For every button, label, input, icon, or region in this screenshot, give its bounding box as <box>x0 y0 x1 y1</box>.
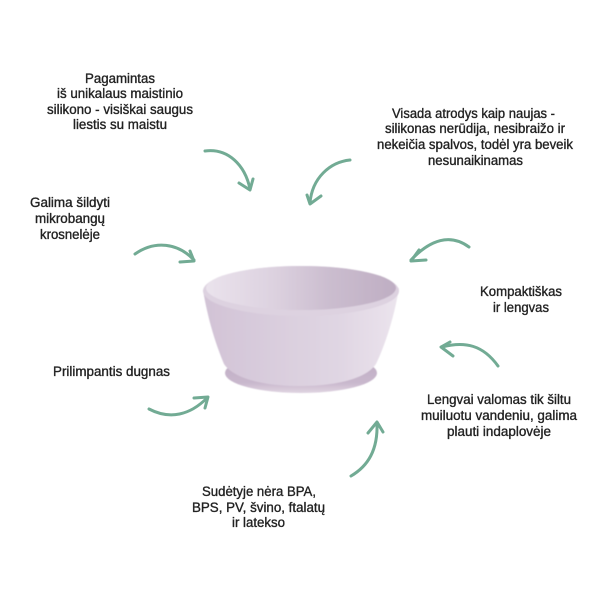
arrow: bottom <box>351 422 383 476</box>
arrow: left lower <box>149 397 208 415</box>
arrow: top left <box>205 151 253 190</box>
text: free from harmful substances: Sudėtyje nėra BPA, <box>202 484 316 499</box>
text: compact and light: ir lengvas <box>493 300 549 315</box>
text: easy to clean: muiluotu vandeniu, galima <box>421 408 577 423</box>
bowl outer body <box>203 288 399 386</box>
text: food-grade silicone <box>47 71 193 132</box>
bowl interior <box>206 266 396 310</box>
arrow: right upper <box>411 240 469 261</box>
bowl illustration <box>203 266 399 393</box>
text: food-grade silicone: silikono - visiškai saugus <box>47 102 193 117</box>
text: always looks new: nekeičia spalvos, todėl yra beveik <box>377 137 573 152</box>
text: always looks new: silikonas nerūdija, nesibraižo ir <box>385 121 565 136</box>
text: free from harmful substances: BPS, PV, švino, ftalatų <box>192 500 325 515</box>
text: free from harmful substances: ir latekso <box>232 515 285 530</box>
text: always looks new: nesunaikinamas <box>428 153 523 168</box>
bowl rim <box>203 266 399 316</box>
arrow: top right <box>307 160 350 204</box>
arrow: left upper <box>135 245 194 262</box>
text: always looks new: Visada atrodys kaip naujas - <box>392 106 555 121</box>
text: easy to clean: plauti indaplovėje <box>447 424 551 439</box>
arrow: right lower <box>441 342 498 366</box>
text: easy to clean <box>421 392 577 439</box>
text: compact and light <box>480 284 562 315</box>
text: easy to clean: Lengvai valomas tik šiltu <box>427 392 571 407</box>
text: food-grade silicone: Pagamintas <box>85 71 155 86</box>
text: food-grade silicone: iš unikalaus maistinio <box>57 86 183 101</box>
text: microwave safe <box>30 195 110 242</box>
text: microwave safe: mikrobangų <box>35 211 105 226</box>
text: suction base: Prilimpantis dugnas <box>53 364 170 379</box>
bowl suction base <box>225 353 377 393</box>
text: always looks new <box>377 106 573 168</box>
text: microwave safe: Galima šildyti <box>30 195 110 210</box>
text: free from harmful substances <box>192 484 325 530</box>
text: compact and light: Kompaktiškas <box>480 284 562 299</box>
text: food-grade silicone: liestis su maistu <box>73 117 167 132</box>
text: microwave safe: krosnelėje <box>40 227 100 242</box>
